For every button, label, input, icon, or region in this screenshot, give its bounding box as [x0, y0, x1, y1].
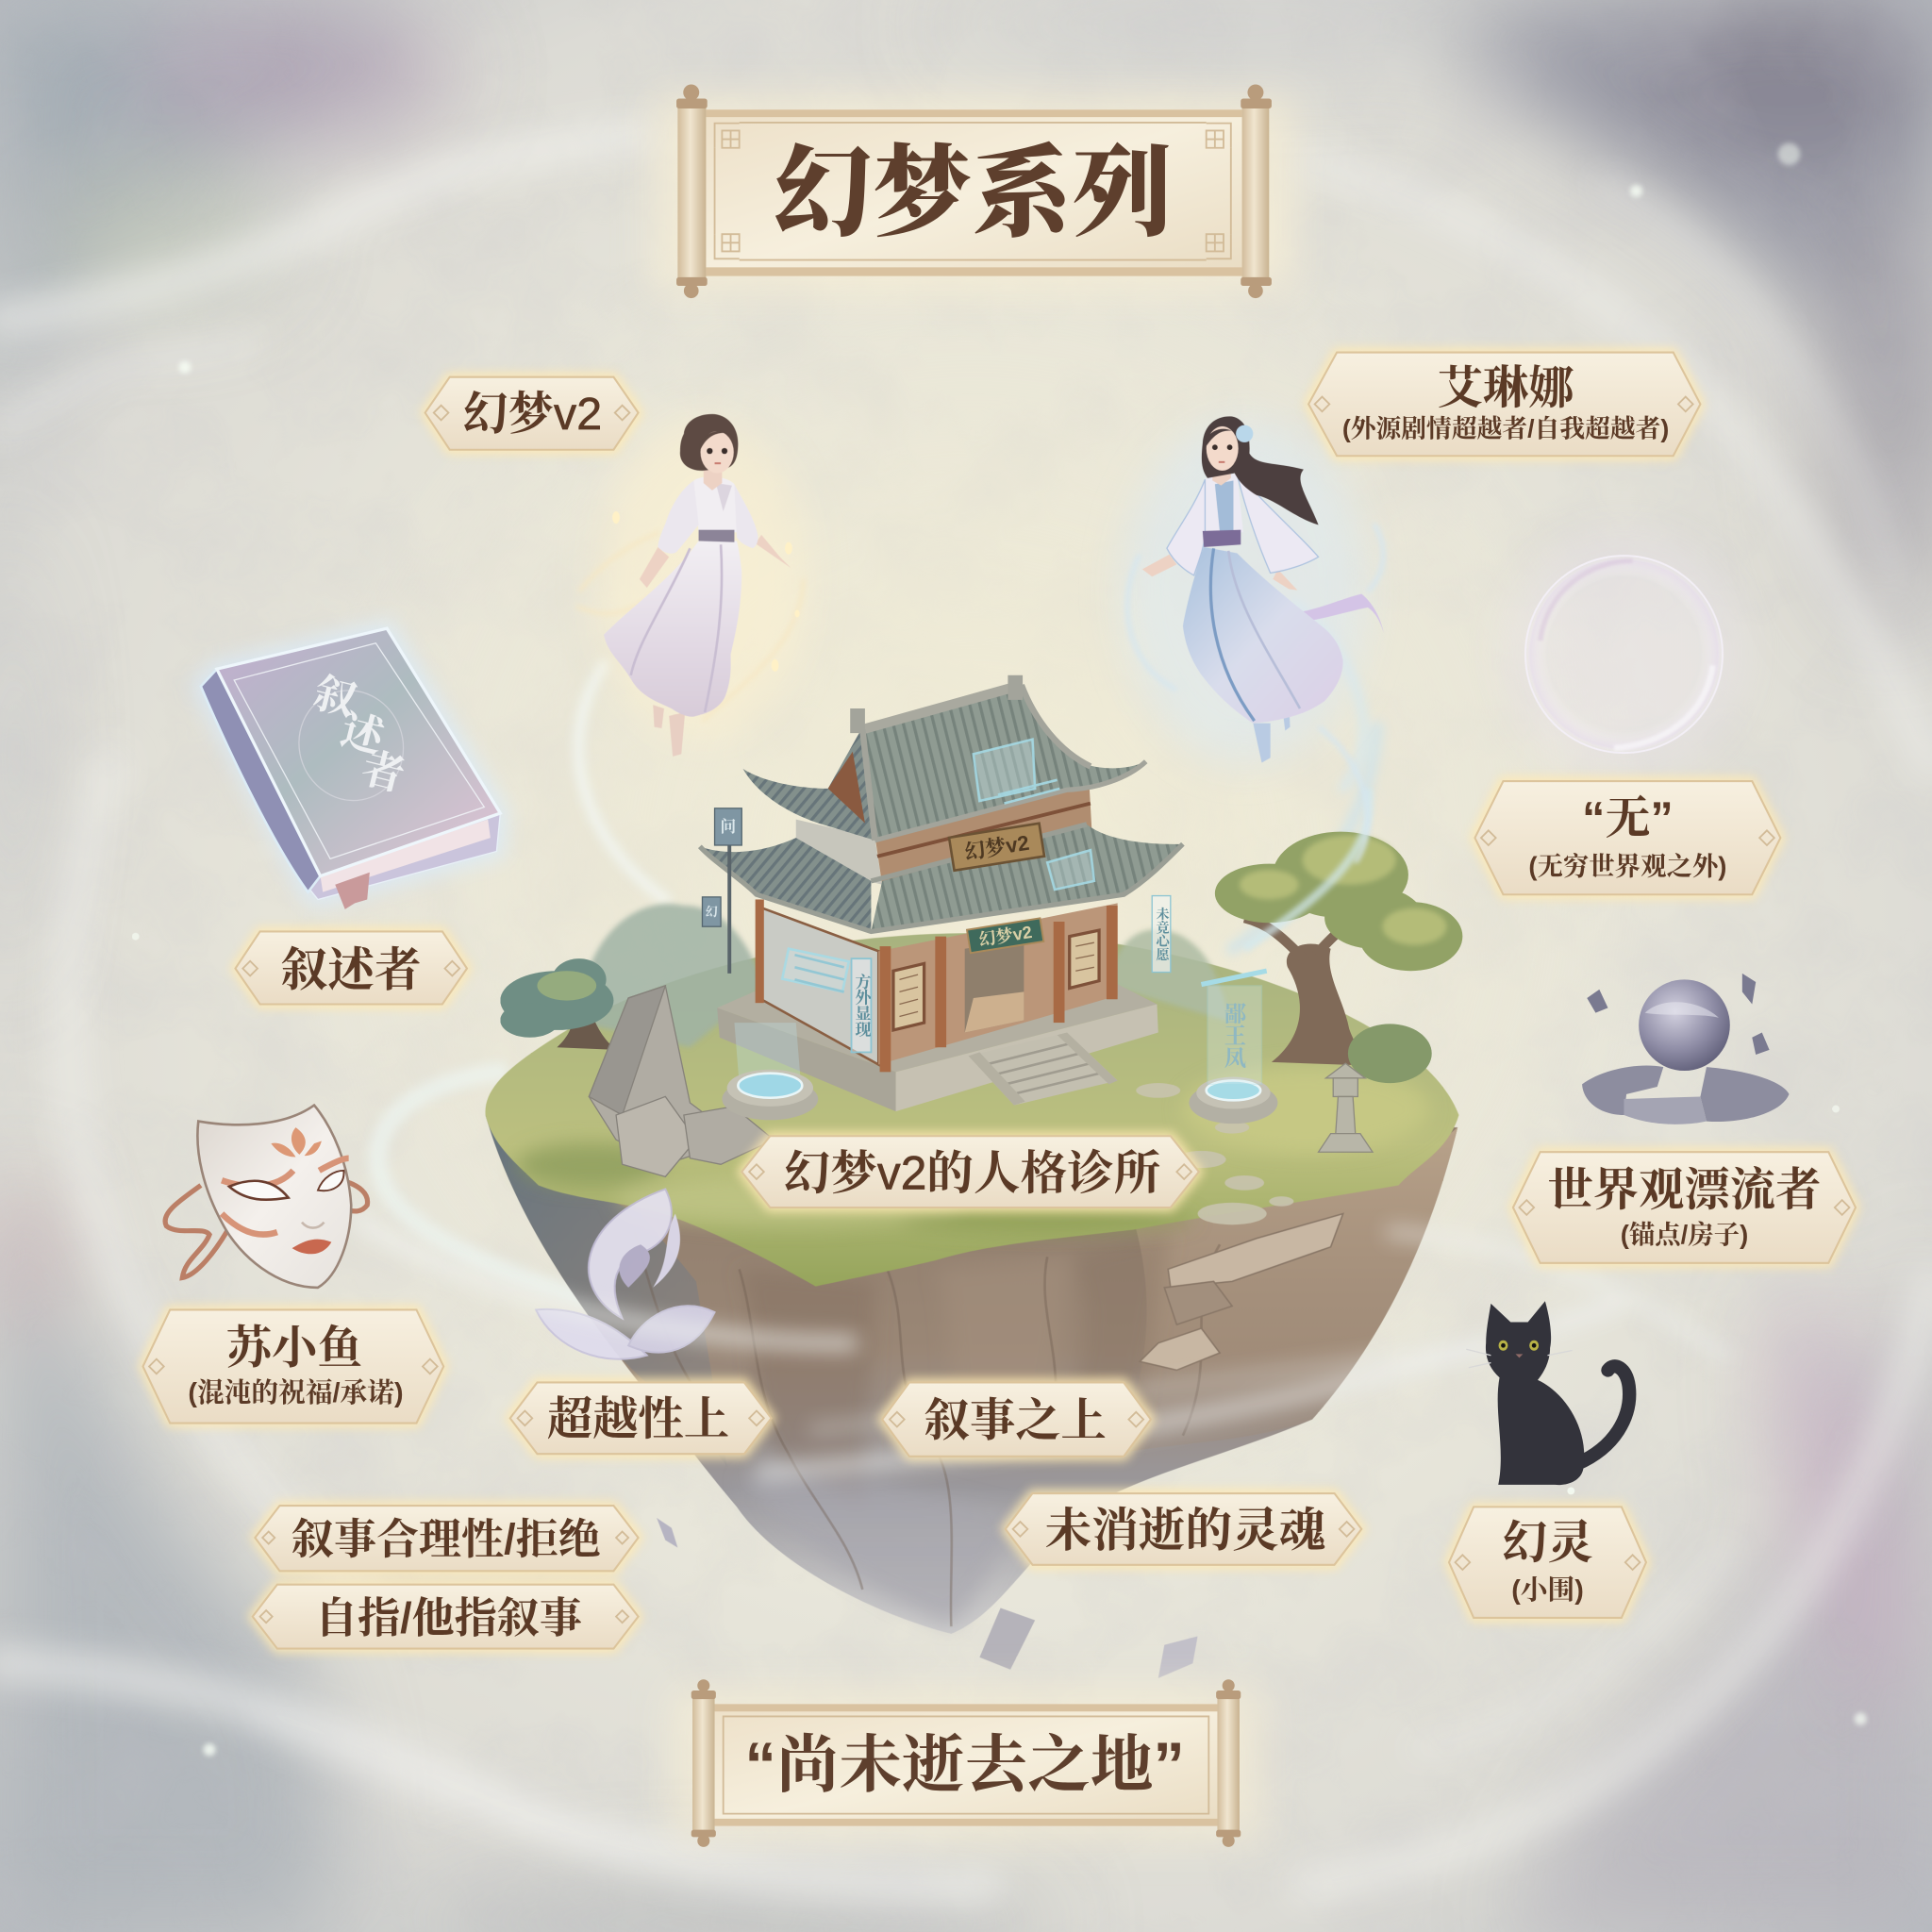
grass mottling	[518, 1066, 1429, 1232]
label: 幻梦v2: 幻梦v2	[462, 389, 602, 440]
right banner: 未竟心愿	[1154, 907, 1169, 962]
title paper	[706, 109, 1242, 276]
icon: cat	[1466, 1301, 1629, 1485]
floating island	[485, 904, 1458, 1634]
label: 未消逝的灵魂	[1006, 1493, 1361, 1565]
stairs	[969, 1033, 1118, 1106]
label: 幻梦v2的人格诊所: 幻梦v2的人格诊所	[784, 1146, 1160, 1199]
bottom text: “尚未逝去之地”	[745, 1731, 1185, 1801]
rocks	[589, 986, 774, 1176]
label: 叙事之上: 叙事之上	[924, 1395, 1107, 1446]
upper sign	[949, 824, 1044, 871]
hologram panels	[782, 740, 1094, 991]
left hologram pedestal	[722, 1023, 818, 1120]
stepping stones	[1136, 1083, 1293, 1224]
icon: narrator book	[201, 628, 500, 909]
label: 艾琳娜: 艾琳娜	[1438, 362, 1574, 413]
mist bands across the rock	[358, 1220, 1725, 1473]
label: 世界观漂流者: (锚点/房子)	[1621, 1220, 1748, 1249]
right hologram pedestal	[1189, 971, 1277, 1124]
bottom scroll	[672, 1679, 1263, 1847]
label: 自指/他指叙事: 自指/他指叙事	[315, 1593, 582, 1641]
label: 叙事之上	[882, 1382, 1151, 1457]
island grass top	[485, 933, 1458, 1287]
label: 叙事合理性/拒绝: 叙事合理性/拒绝	[291, 1515, 601, 1563]
doorway	[965, 939, 1024, 1033]
island rock base	[486, 1115, 1457, 1634]
character: 幻梦v2	[576, 414, 808, 757]
label: 未消逝的灵魂: 未消逝的灵魂	[1045, 1504, 1325, 1557]
label: “无”: (无穷世界观之外)	[1528, 852, 1726, 881]
left tree	[500, 958, 616, 1050]
icon: glass sphere ring	[1501, 530, 1747, 776]
label: 苏小鱼	[143, 1309, 443, 1424]
label: 叙事合理性/拒绝	[255, 1506, 639, 1571]
lower sign: 幻梦v2	[977, 922, 1033, 950]
icon: narrator book: 者	[358, 745, 409, 800]
temple	[700, 675, 1183, 1111]
label: 苏小鱼: 苏小鱼	[226, 1323, 363, 1374]
label: 幻灵: (小围)	[1511, 1575, 1584, 1606]
hologram banner: 方外显现	[852, 974, 871, 1038]
label: 艾琳娜	[1308, 353, 1700, 456]
icon: opera mask	[165, 1106, 368, 1288]
label: 幻梦v2的人格诊所	[741, 1136, 1199, 1208]
glowing swirl over tree	[1244, 789, 1369, 949]
right tree	[1215, 832, 1462, 1083]
icon: orb on stone ring	[1582, 974, 1789, 1124]
bottom rollers	[691, 1679, 1241, 1847]
label: 幻灵: 幻灵	[1502, 1517, 1593, 1568]
front wall	[878, 903, 1118, 1064]
temple base platform	[717, 949, 1158, 1111]
label: 超越性上	[510, 1382, 772, 1454]
hanging signs	[702, 808, 741, 974]
lattice windows	[893, 930, 1099, 1030]
bottom paper	[715, 1704, 1217, 1826]
right banner	[1152, 896, 1171, 973]
spirit lotus icon	[536, 1189, 715, 1359]
hanging signs: 问	[720, 818, 736, 836]
label: 超越性上: 超越性上	[547, 1394, 729, 1445]
background hills	[579, 904, 1232, 1047]
label: 幻梦v2	[425, 377, 639, 450]
columns	[756, 899, 1118, 1072]
label: “无”: “无”	[1582, 792, 1674, 843]
label: “无”	[1474, 781, 1780, 894]
label: 幻灵	[1449, 1507, 1646, 1618]
label: 世界观漂流者: 世界观漂流者	[1548, 1165, 1821, 1216]
title scroll	[653, 84, 1293, 298]
stone lantern	[1319, 1063, 1373, 1152]
label: 艾琳娜: (外源剧情超越者/自我超越者)	[1342, 415, 1669, 443]
hanging signs: 幻	[706, 905, 718, 919]
lower roof	[700, 824, 1183, 931]
label: 苏小鱼: (混沌的祝福/承诺)	[188, 1378, 404, 1408]
top roof	[743, 675, 1146, 841]
title rollers	[676, 84, 1272, 298]
hologram banner	[852, 958, 871, 1052]
title text: 幻梦系列	[773, 138, 1172, 249]
label: 自指/他指叙事	[253, 1585, 639, 1649]
icon: narrator book: 叙	[309, 670, 361, 724]
label: 世界观漂流者	[1513, 1152, 1856, 1263]
left wall	[759, 907, 878, 1064]
label: 叙述者: 叙述者	[281, 943, 422, 996]
character: 艾琳娜	[1122, 416, 1384, 862]
swirling energy around the island	[377, 604, 1377, 1306]
upper sign: 幻梦v2	[963, 831, 1031, 864]
floating stones	[657, 1518, 1198, 1678]
icon: narrator book: 述	[337, 707, 391, 762]
lower sign	[967, 918, 1043, 953]
rock ledges	[1140, 1214, 1343, 1370]
label: 叙述者	[235, 931, 467, 1004]
right hologram pedestal: 鄙王凤	[1221, 1002, 1246, 1069]
upper storey	[796, 784, 1091, 885]
